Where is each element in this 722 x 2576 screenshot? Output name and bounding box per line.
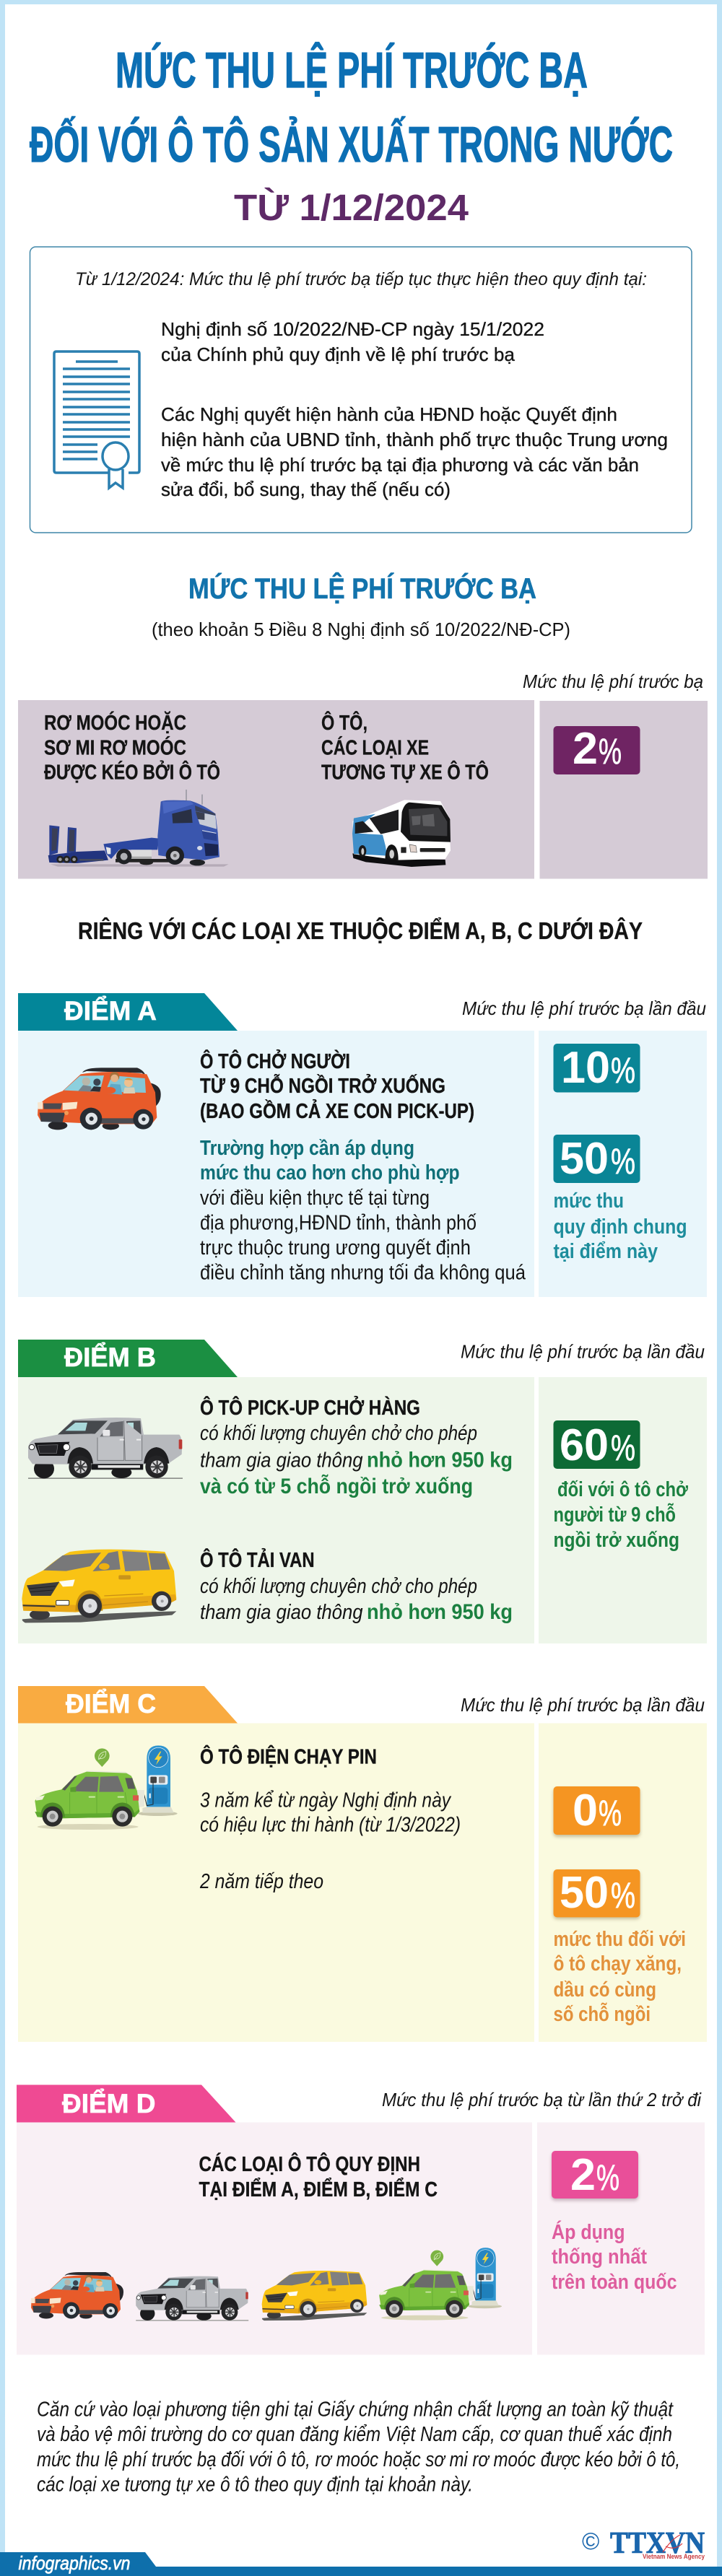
60% badge: % bbox=[611, 1428, 635, 1468]
rate note B: ngồi trở xuống bbox=[553, 1529, 679, 1552]
2% badge D: 2 bbox=[570, 2150, 596, 2200]
heading D: CÁC LOẠI Ô TÔ QUY ĐỊNH bbox=[199, 2152, 420, 2176]
icon: grey pick-up bbox=[28, 1418, 183, 1479]
heading D bbox=[199, 2152, 438, 2201]
2% badge: % bbox=[599, 731, 622, 772]
car text: CÁC LOẠI XE bbox=[321, 735, 429, 759]
EV text: có hiệu lực thi hành (từ 1/3/2022) bbox=[200, 1813, 461, 1836]
note A: với điều kiện thực tế tại từng bbox=[200, 1187, 430, 1210]
rate note A: tại điểm này bbox=[553, 1240, 658, 1263]
10% badge: % bbox=[611, 1050, 635, 1091]
van text: nhỏ hơn 950 kg bbox=[367, 1600, 513, 1624]
resolutions text: Các Nghị quyết hiện hành của HĐND hoặc Quyết định bbox=[161, 403, 617, 425]
rate note A: mức thu bbox=[553, 1189, 624, 1213]
60% badge bbox=[553, 1420, 640, 1470]
rate note C bbox=[553, 1928, 686, 2026]
rate note C: số chỗ ngồi bbox=[553, 2001, 651, 2026]
tab: point D: ĐIỂM D bbox=[62, 2088, 156, 2118]
rate note D: trên toàn quốc bbox=[552, 2271, 677, 2294]
tab: point C bbox=[18, 1686, 238, 1724]
note A: trực thuộc trung ương quyết định bbox=[200, 1236, 471, 1259]
icon: coach bus bbox=[352, 800, 451, 867]
icon: red family car bbox=[38, 1067, 161, 1130]
pick-up text: và có từ 5 chỗ ngồi trở xuống bbox=[200, 1474, 473, 1498]
rate note D: Áp dụng bbox=[552, 2219, 625, 2244]
title: TỪ 1/12/2024 bbox=[234, 187, 469, 228]
rate note B bbox=[553, 1478, 688, 1552]
0% badge: 0 bbox=[573, 1786, 598, 1835]
heading A: (BAO GỒM CẢ XE CON PICK-UP) bbox=[200, 1099, 474, 1123]
rate note A: quy định chung bbox=[553, 1215, 687, 1239]
closing note: các loại xe tương tự xe ô tô theo quy định tại khoản này. bbox=[37, 2473, 473, 2496]
pick-up text: nhỏ hơn 950 kg bbox=[367, 1449, 513, 1472]
0% badge bbox=[553, 1786, 640, 1837]
50% badge bbox=[553, 1134, 640, 1184]
caption D: Mức thu lệ phí trước bạ từ lần thứ 2 trở đi bbox=[382, 2089, 702, 2110]
caption A: Mức thu lệ phí trước bạ lần đầu bbox=[462, 997, 706, 1019]
EV text bbox=[199, 1744, 461, 1893]
logo: TTXVN: © bbox=[582, 2528, 599, 2554]
pick-up text: tham gia giao thông bbox=[200, 1449, 362, 1472]
rate note B: người từ 9 chỗ bbox=[553, 1502, 676, 1527]
10% badge: 10 bbox=[561, 1043, 610, 1093]
50% badge C bbox=[553, 1868, 640, 1919]
0% badge: % bbox=[599, 1793, 622, 1833]
panel: point B bbox=[18, 1340, 707, 1643]
tab: point A: ĐIỂM A bbox=[64, 995, 157, 1026]
closing note bbox=[37, 2398, 680, 2496]
heading D: TẠI ĐIỂM A, ĐIỂM B, ĐIỂM C bbox=[199, 2177, 438, 2201]
decree text bbox=[161, 318, 544, 365]
van text: tham gia giao thông bbox=[200, 1601, 362, 1624]
2% badge D: % bbox=[596, 2157, 619, 2198]
rate note B: đối với ô tô chở bbox=[557, 1478, 688, 1501]
tab: point B bbox=[18, 1340, 238, 1377]
EV text: Ô TÔ ĐIỆN CHẠY PIN bbox=[200, 1744, 377, 1768]
logo: TTXVN: TTXVN bbox=[610, 2527, 705, 2560]
50% badge C: 50 bbox=[560, 1868, 609, 1918]
tab: point C: ĐIỂM C bbox=[66, 1688, 156, 1719]
rate note A bbox=[553, 1189, 687, 1263]
decree text: của Chính phủ quy định về lệ phí trước bạ bbox=[161, 344, 516, 365]
rate note C: dầu có cùng bbox=[553, 1978, 656, 2001]
EV text: 3 năm kể từ ngày Nghị định này bbox=[200, 1789, 451, 1812]
icon: four vehicles row bbox=[31, 2248, 502, 2321]
note A: địa phương,HĐND tỉnh, thành phố bbox=[200, 1211, 477, 1234]
EV text: 2 năm tiếp theo bbox=[199, 1870, 323, 1893]
rate note D bbox=[552, 2219, 677, 2294]
50% badge C: % bbox=[611, 1875, 635, 1916]
icon: electric car at charger bbox=[35, 1745, 178, 1830]
section heading bbox=[152, 572, 570, 640]
panel: point A bbox=[18, 993, 707, 1297]
note A: mức thu cao hơn cho phù hợp bbox=[200, 1161, 459, 1184]
heading A: Ô TÔ CHỞ NGƯỜI bbox=[200, 1049, 350, 1073]
pick-up text: có khối lượng chuyên chở cho phép bbox=[200, 1422, 477, 1445]
rate note D: thống nhất bbox=[552, 2245, 647, 2269]
panel: point C bbox=[18, 1686, 707, 2042]
subheading: points A, B, C: RIÊNG VỚI CÁC LOẠI XE THUỘC ĐIỂM A, B, C DƯỚI ĐÂY bbox=[78, 917, 643, 944]
panel: general rate bbox=[18, 700, 708, 879]
icon: certificate document bbox=[54, 352, 139, 488]
resolutions text: về mức thu lệ phí trước bạ tại địa phương và các văn bản bbox=[161, 454, 639, 476]
section heading: MỨC THU LỆ PHÍ TRƯỚC BẠ bbox=[188, 572, 536, 605]
decree text: Nghị định số 10/2022/NĐ-CP ngày 15/1/2022 bbox=[161, 318, 544, 340]
car text: Ô TÔ, bbox=[321, 710, 367, 735]
10% badge bbox=[553, 1043, 640, 1093]
note A: điều chỉnh tăng nhưng tối đa không quá bbox=[200, 1262, 526, 1285]
pick-up text bbox=[200, 1395, 513, 1498]
car text bbox=[321, 710, 489, 784]
trailer text: SƠ MI RƠ MOÓC bbox=[44, 735, 186, 759]
icon: yellow van bbox=[22, 1550, 176, 1623]
heading A: TỪ 9 CHỖ NGỒI TRỞ XUỐNG bbox=[200, 1073, 445, 1098]
pick-up text: Ô TÔ PICK-UP CHỞ HÀNG bbox=[200, 1395, 420, 1420]
caption C: Mức thu lệ phí trước bạ lần đầu bbox=[461, 1694, 705, 1716]
caption B: Mức thu lệ phí trước bạ lần đầu bbox=[461, 1341, 705, 1363]
intro text: Từ 1/12/2024: Mức thu lệ phí trước bạ tiếp tục thực hiện theo quy định tại: bbox=[75, 269, 647, 289]
section heading: (theo khoản 5 Điều 8 Nghị định số 10/2022/NĐ-CP) bbox=[152, 619, 570, 640]
van text: Ô TÔ TẢI VAN bbox=[200, 1547, 315, 1572]
footer bar: infographics.vn bbox=[19, 2552, 130, 2574]
trailer text: ĐƯỢC KÉO BỞI Ô TÔ bbox=[44, 759, 220, 784]
50% badge: % bbox=[611, 1141, 635, 1182]
2% badge bbox=[553, 724, 640, 774]
tab: point B: ĐIỂM B bbox=[64, 1342, 156, 1372]
tab: point A bbox=[18, 993, 238, 1031]
2% badge D bbox=[552, 2150, 638, 2201]
van text bbox=[200, 1547, 513, 1624]
title bbox=[30, 41, 673, 228]
panel: point D bbox=[17, 2084, 705, 2354]
trailer text: RƠ MOÓC HOẶC bbox=[44, 710, 186, 735]
footer bar bbox=[0, 2552, 722, 2576]
60% badge: 60 bbox=[560, 1420, 609, 1470]
note A bbox=[200, 1137, 526, 1285]
car text: TƯƠNG TỰ XE Ô TÔ bbox=[321, 759, 489, 784]
rate column caption: Mức thu lệ phí trước bạ bbox=[523, 671, 703, 692]
panel: legal basis bbox=[30, 247, 692, 533]
50% badge: 50 bbox=[560, 1134, 609, 1184]
resolutions text: sửa đổi, bổ sung, thay thế (nếu có) bbox=[161, 479, 451, 500]
note A: Trường hợp cần áp dụng bbox=[200, 1137, 414, 1160]
trailer text bbox=[44, 710, 220, 784]
rate note C: mức thu đối với bbox=[553, 1928, 686, 1951]
tab: point D bbox=[17, 2084, 235, 2122]
logo: TTXVN bbox=[582, 2527, 705, 2561]
van text: có khối lượng chuyên chở cho phép bbox=[200, 1575, 477, 1598]
icon: blue truck with semi trailer bbox=[48, 790, 229, 867]
rate note C: ô tô chạy xăng, bbox=[553, 1952, 682, 1975]
heading A bbox=[200, 1049, 474, 1123]
2% badge: 2 bbox=[573, 724, 598, 774]
logo: TTXVN: Vietnam News Agency bbox=[643, 2553, 705, 2561]
resolutions text: hiện hành của UBND tỉnh, thành phố trực thuộc Trung ương bbox=[161, 429, 668, 450]
resolutions text bbox=[161, 403, 668, 500]
